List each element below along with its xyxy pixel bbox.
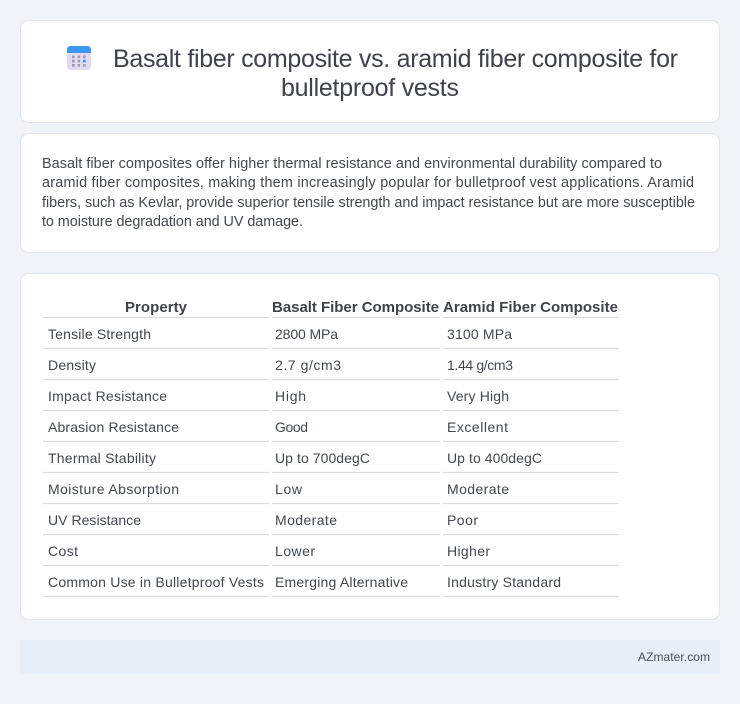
row: density: 1.44 g/cm3 xyxy=(447,357,513,373)
row: tensile strength xyxy=(48,326,512,342)
row: density: Density xyxy=(48,357,96,373)
row: moisture absorption: Moderate xyxy=(447,481,509,497)
row: impact resistance: Very High xyxy=(447,388,509,404)
row: common use: Common Use in Bulletproof Vests xyxy=(48,574,264,590)
row: uv resistance: Moderate xyxy=(275,512,337,528)
panel: comparison table xyxy=(20,274,720,620)
title xyxy=(113,45,678,102)
text block: summary: aramid fiber composites, making them increasingly popular for bulletproof vest applications. Aramid xyxy=(42,175,694,191)
row: impact resistance: High xyxy=(275,388,306,404)
title: bulletproof vests xyxy=(281,74,459,102)
row: abrasion resistance: Abrasion Resistance xyxy=(48,419,179,435)
table header xyxy=(125,299,618,316)
row: abrasion resistance: Good xyxy=(275,419,308,435)
footer xyxy=(20,640,720,674)
row: cost: Higher xyxy=(447,543,490,559)
row: common use xyxy=(48,574,561,590)
row: impact resistance: Impact Resistance xyxy=(48,388,167,404)
table header: Property xyxy=(125,299,188,316)
row: uv resistance xyxy=(48,512,478,528)
row: thermal stability xyxy=(48,450,542,466)
row: impact resistance xyxy=(48,388,509,404)
row: tensile strength: 2800 MPa xyxy=(275,326,338,342)
row: tensile strength: Tensile Strength xyxy=(48,326,151,342)
row: uv resistance: Poor xyxy=(447,512,478,528)
row: cost xyxy=(48,543,490,559)
row: tensile strength: 3100 MPa xyxy=(447,326,512,342)
row: cost: Lower xyxy=(275,543,315,559)
panel: introduction xyxy=(20,134,720,252)
title: Basalt fiber composite vs. aramid fiber composite for xyxy=(113,45,678,73)
row: thermal stability: Thermal Stability xyxy=(48,450,156,466)
row: moisture absorption: Low xyxy=(275,481,303,497)
row: density xyxy=(48,357,513,373)
icon: calendar xyxy=(67,46,91,70)
text block: summary: to moisture degradation and UV damage. xyxy=(42,214,303,230)
text block: summary xyxy=(42,156,695,230)
table header: Basalt Fiber Composite xyxy=(272,299,439,316)
row: common use: Emerging Alternative xyxy=(275,574,408,590)
row: thermal stability: Up to 700degC xyxy=(275,450,370,466)
row: moisture absorption xyxy=(48,481,509,497)
row: moisture absorption: Moisture Absorption xyxy=(48,481,179,497)
panel: title card xyxy=(20,20,720,122)
text block: summary: fibers, such as Kevlar, provide superior tensile strength and impact resistance but are more susceptible xyxy=(42,195,695,211)
table header: Aramid Fiber Composite xyxy=(443,299,618,316)
row: density: 2.7 g/cm3 xyxy=(275,357,341,373)
row: common use: Industry Standard xyxy=(447,574,561,590)
footer credit: AZmater.com xyxy=(638,650,710,664)
row: cost: Cost xyxy=(48,543,78,559)
text block: summary: Basalt fiber composites offer higher thermal resistance and environmental durability compared to xyxy=(42,156,662,172)
row: uv resistance: UV Resistance xyxy=(48,512,141,528)
row: thermal stability: Up to 400degC xyxy=(447,450,542,466)
row: abrasion resistance: Excellent xyxy=(447,419,508,435)
row: abrasion resistance xyxy=(48,419,508,435)
